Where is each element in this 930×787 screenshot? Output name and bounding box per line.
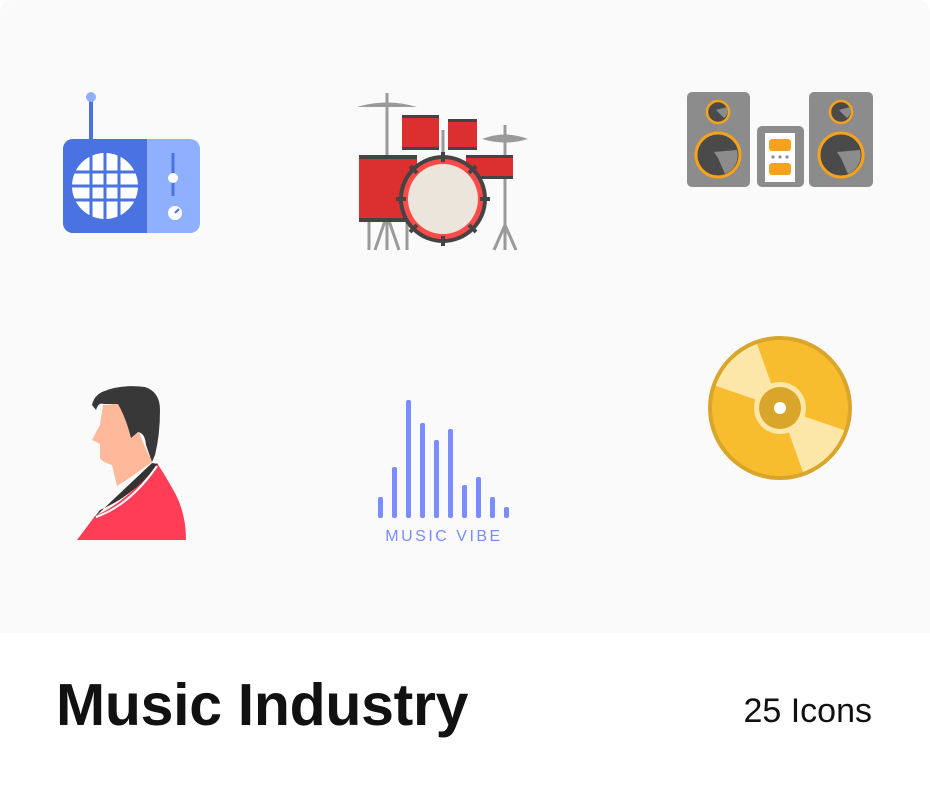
icon: music vibe bars: [378, 400, 509, 545]
icon: music vibe bars: MUSIC VIBE: [385, 528, 503, 545]
icon: drum kit: [357, 93, 528, 250]
icons: [63, 92, 873, 541]
title: Music Industry: [56, 672, 468, 738]
icon count: 25 Icons: [743, 692, 872, 730]
icon: man profile: [77, 386, 186, 540]
icon: stereo speakers: [687, 92, 873, 187]
icon: compact disc: [708, 336, 852, 480]
icon: radio: [63, 92, 200, 233]
